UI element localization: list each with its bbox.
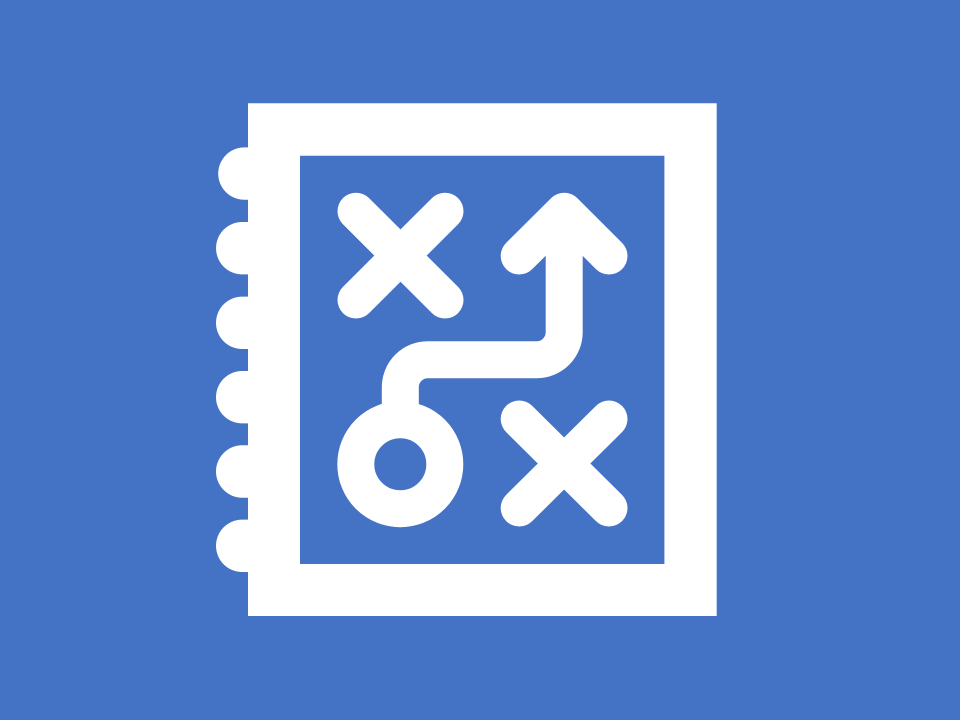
icon: route arrow [400, 211, 609, 410]
icon: spiral binding tabs [216, 147, 250, 572]
icon: playbook with strategy diagram [216, 103, 717, 616]
icon: circle marker [356, 420, 445, 509]
icon: bottom-right X mark [519, 419, 609, 508]
icon: top-left X mark [356, 211, 445, 300]
icon: notebook cover [248, 103, 717, 616]
